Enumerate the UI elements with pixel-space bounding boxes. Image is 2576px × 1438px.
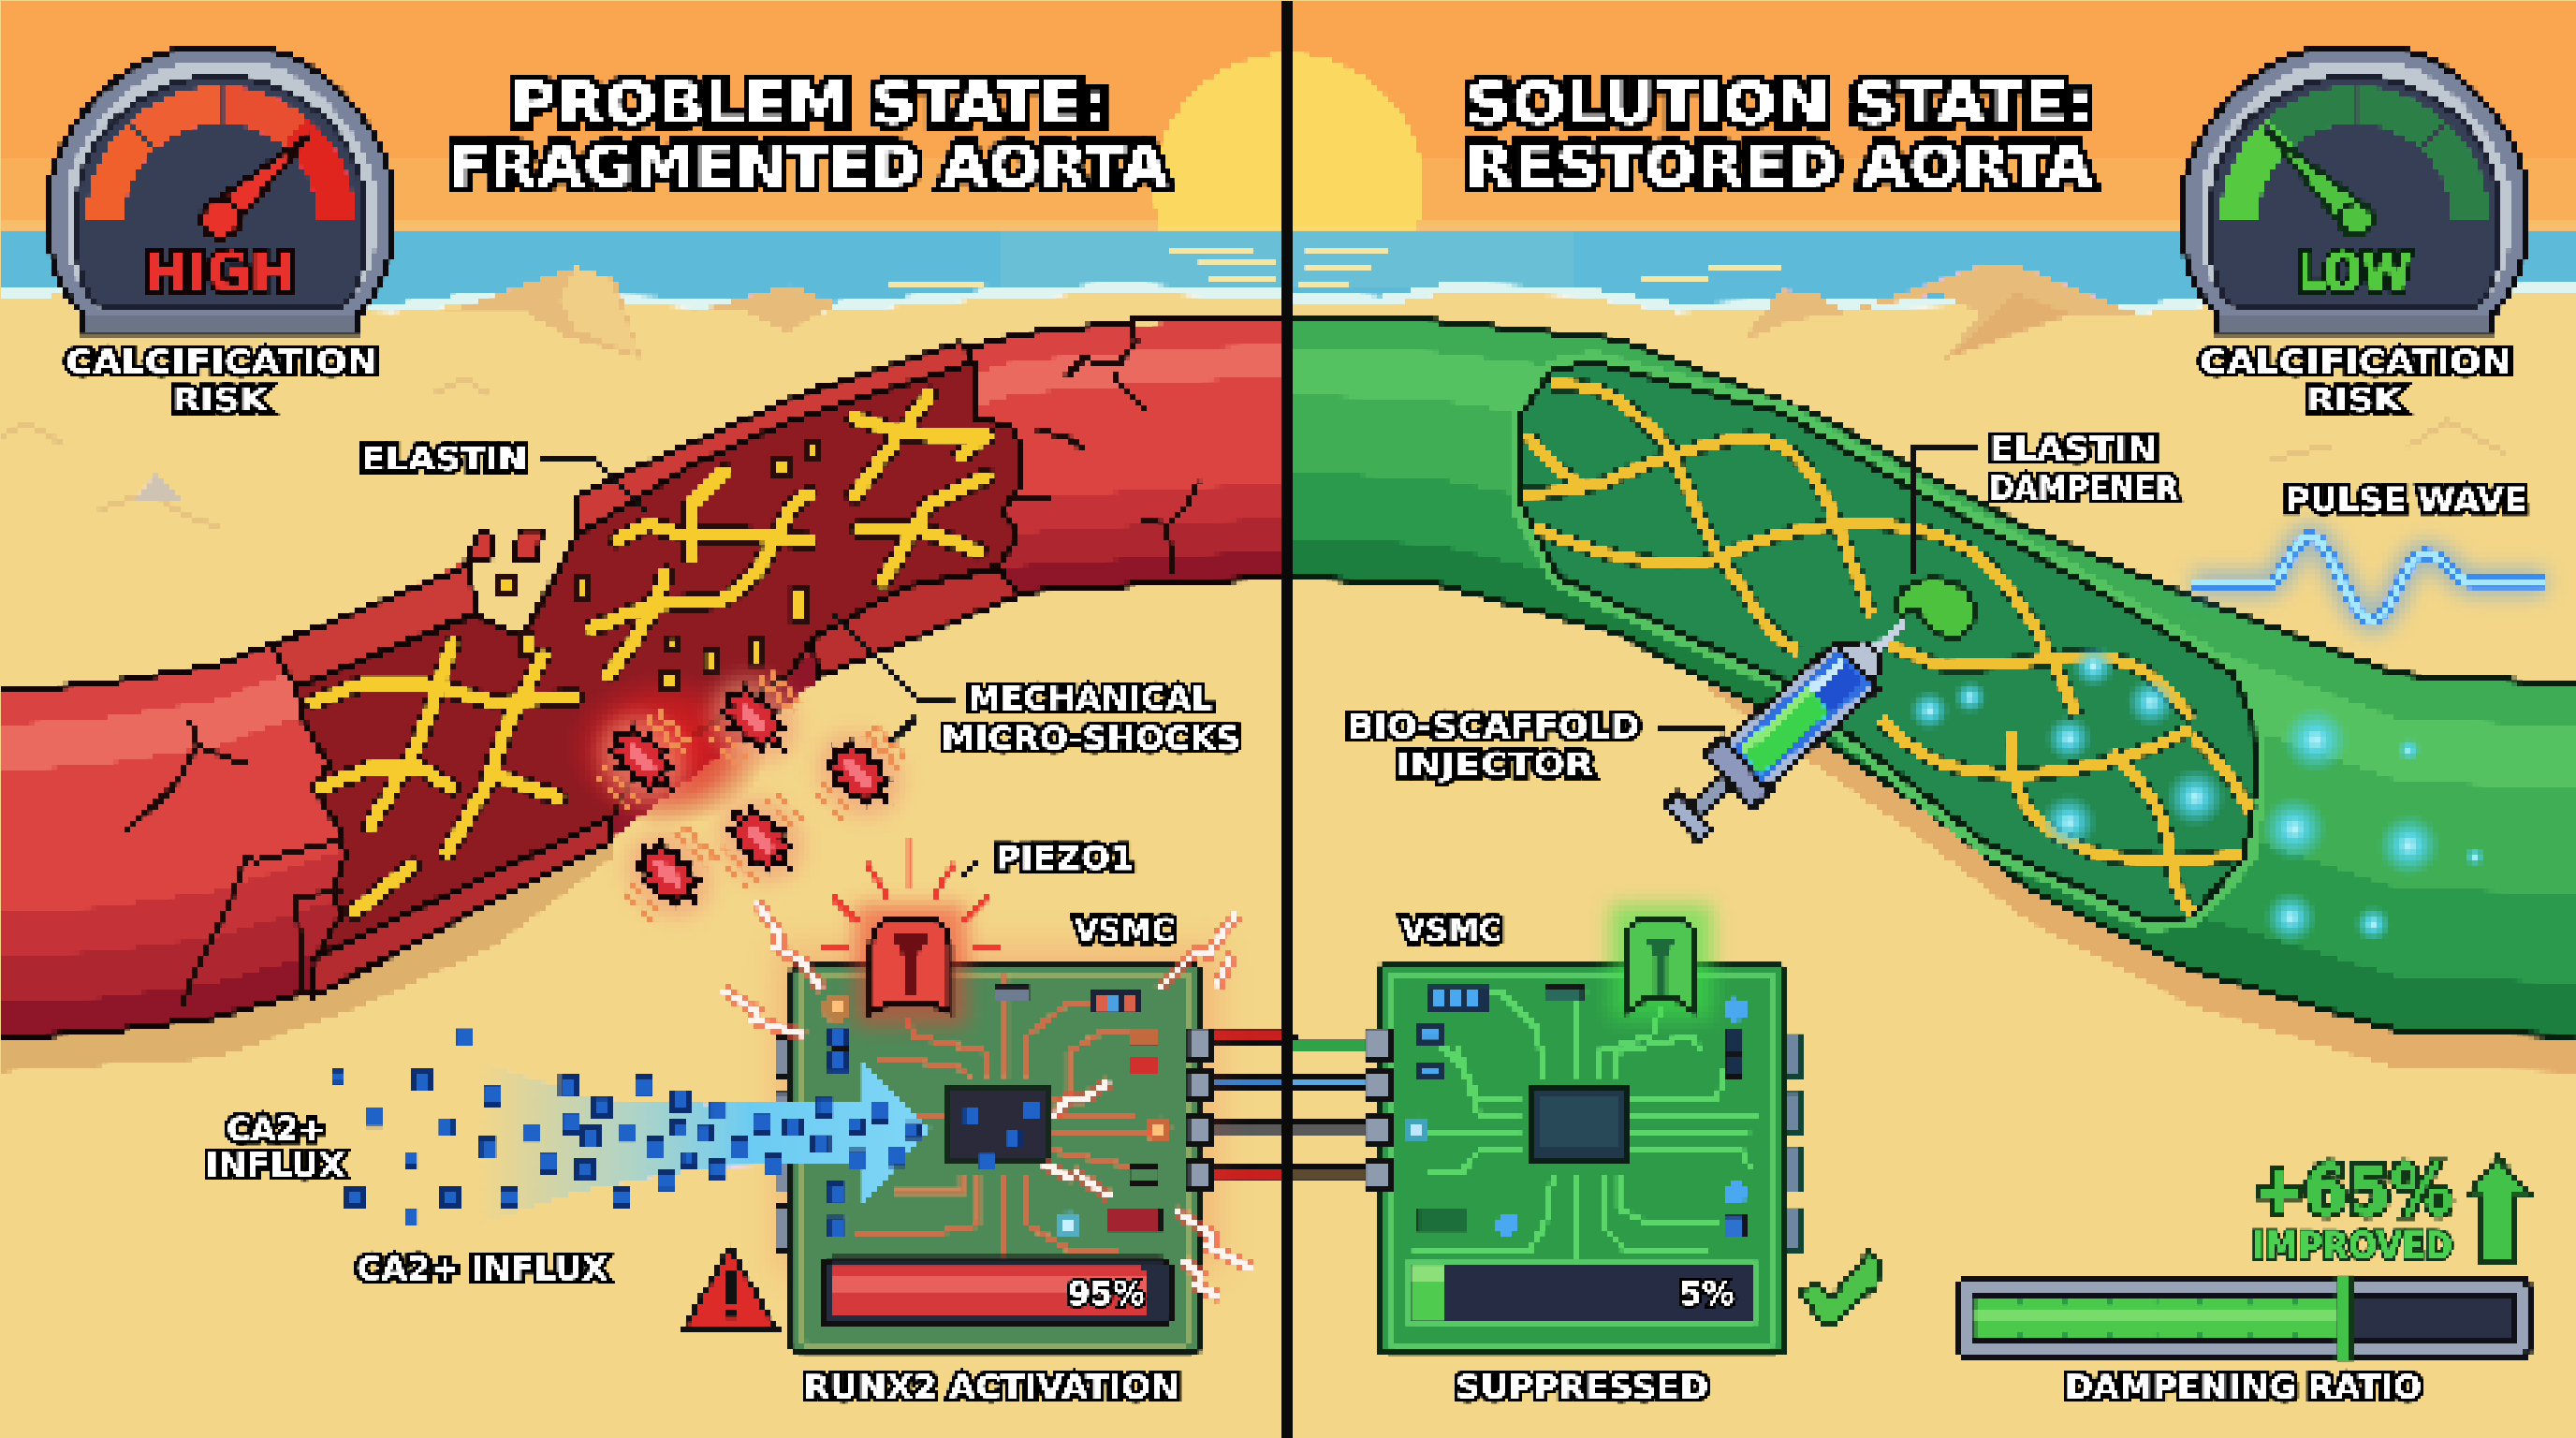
label: CA2+ influx stacked: INFLUX xyxy=(205,1147,345,1185)
calcium ions xyxy=(332,1027,1038,1236)
wall fragments xyxy=(466,529,542,559)
icon: piezo1 channel activated xyxy=(822,838,999,1025)
icon: piezo1 channel calm xyxy=(1610,903,1712,1019)
title: solution state: SOLUTION STATE: xyxy=(1466,71,2093,138)
title: problem state: FRAGMENTED AORTA xyxy=(448,133,1168,199)
diagram: calcium ion influx xyxy=(332,1027,1038,1236)
sand dunes xyxy=(444,263,2134,359)
label: calcification risk right xyxy=(2200,343,2512,419)
label: 95 percent: 95% xyxy=(1068,1275,1145,1313)
label: mechanical micro-shocks: MICRO-SHOCKS xyxy=(942,719,1240,757)
icon: bio-scaffold syringe injector xyxy=(1657,595,1927,849)
influx arrow xyxy=(476,1060,931,1225)
torn wall strips xyxy=(271,342,1018,996)
board components xyxy=(822,986,1171,1238)
elastin dampener injection blob xyxy=(1896,579,1973,640)
green aorta ground shadow xyxy=(1708,666,2576,1071)
gauge reading: low: LOW xyxy=(2297,241,2411,304)
icon: central cable bundle xyxy=(1208,1035,1367,1173)
exposed lumen xyxy=(296,361,1020,956)
leader: elastin dampener xyxy=(1912,448,1978,575)
aorta red wall bands xyxy=(0,317,1288,1036)
label: mechanical micro-shocks xyxy=(942,680,1240,757)
red board glow xyxy=(775,945,1219,1273)
title: solution state xyxy=(1466,71,2093,199)
label: VSMC right: VSMC xyxy=(1401,912,1501,950)
label: bio-scaffold injector: BIO-SCAFFOLD xyxy=(1347,708,1640,746)
label: calcification risk right: RISK xyxy=(2306,381,2404,419)
panel: fragmented aorta xyxy=(0,317,1288,1071)
circuit traces xyxy=(1412,990,1758,1257)
label: pulse wave: PULSE WAVE xyxy=(2285,481,2526,520)
label: RUNX2 activation: RUNX2 ACTIVATION xyxy=(803,1369,1179,1407)
leader: micro-shocks xyxy=(829,609,953,741)
microchip xyxy=(1530,1090,1628,1158)
micro-shock particles xyxy=(578,655,923,938)
board components xyxy=(1403,986,1747,1236)
right-side pins xyxy=(1186,1029,1211,1188)
aorta outlines xyxy=(0,317,1288,1036)
torn gap in aorta wall xyxy=(465,490,578,638)
title: solution state: RESTORED AORTA xyxy=(1466,133,2094,199)
label: bio-scaffold injector xyxy=(1347,708,1640,784)
cracks in wall xyxy=(124,318,1197,1004)
label: calcification risk right: CALCIFICATION xyxy=(2200,343,2512,381)
elastin fibres xyxy=(1521,384,2249,912)
side connectors xyxy=(775,1036,792,1249)
circuit board body xyxy=(792,962,1199,1354)
title: problem state: PROBLEM STATE: xyxy=(511,71,1107,138)
side connectors xyxy=(1784,1034,1801,1249)
panel: activated VSMC circuit board xyxy=(723,838,1251,1354)
gauge reading: high: HIGH xyxy=(144,241,294,304)
micro-shock glow on lumen xyxy=(564,668,768,827)
label: CA2+ influx: CA2+ INFLUX xyxy=(357,1250,607,1288)
label: mechanical micro-shocks: MECHANICAL xyxy=(968,680,1212,718)
label: CA2+ influx stacked xyxy=(205,1110,345,1185)
leader: bio-scaffold xyxy=(1656,725,1725,727)
aorta green wall bands xyxy=(1288,315,2576,1035)
label: piezo1: PIEZO1 xyxy=(996,839,1134,877)
label: calcification risk left: CALCIFICATION xyxy=(66,343,378,381)
icon: green check mark xyxy=(1799,1251,1880,1325)
rock on the sand xyxy=(128,473,184,503)
stat: +65%: +65% xyxy=(2252,1152,2452,1231)
label: elastin: ELASTIN xyxy=(361,440,527,478)
left-side pins xyxy=(1365,1029,1390,1188)
circuit traces xyxy=(855,973,1150,1257)
glowing repair particles xyxy=(1909,644,2484,943)
label: bio-scaffold injector: INJECTOR xyxy=(1397,745,1593,784)
label: suppressed: SUPPRESSED xyxy=(1456,1369,1708,1407)
RUNX2 progress bar xyxy=(822,1258,1170,1325)
label: dampening ratio: DAMPENING RATIO xyxy=(2065,1369,2422,1407)
electrical sparks xyxy=(723,902,1251,1297)
aorta ground shadow xyxy=(0,838,611,1071)
icon: up arrow improvement xyxy=(2466,1157,2532,1260)
gauge: low calcification risk xyxy=(2184,50,2525,332)
icon: pulse wave xyxy=(2191,536,2545,620)
lumen with elastin lattice xyxy=(1521,361,2254,920)
chart: dampening ratio bar xyxy=(1958,1275,2528,1360)
label: elastin dampener: ELASTIN xyxy=(1989,430,2157,468)
panel: restored aorta xyxy=(1288,315,2576,1071)
stat: improved: IMPROVED xyxy=(2252,1224,2452,1268)
icon: warning triangle xyxy=(683,1247,775,1328)
label: elastin dampener: DAMPENER xyxy=(1989,470,2178,508)
label: calcification risk left: RISK xyxy=(172,381,270,419)
center divider xyxy=(1283,0,1293,1438)
suppressed progress bar xyxy=(1406,1260,1756,1325)
leader: piezo1 xyxy=(961,861,977,877)
label: CA2+ influx stacked: CA2+ xyxy=(227,1110,326,1149)
green aorta outlines xyxy=(1288,315,2576,1035)
label: elastin dampener xyxy=(1989,430,2178,508)
broken elastin fibres xyxy=(312,394,986,912)
label: calcification risk left xyxy=(66,343,378,419)
title: problem state xyxy=(448,71,1168,199)
label: 5 percent: 5% xyxy=(1679,1275,1734,1313)
panel: suppressed VSMC circuit board xyxy=(1365,903,1801,1354)
gauge: high calcification risk xyxy=(50,50,391,332)
leader: elastin xyxy=(539,459,644,509)
microchip xyxy=(944,1090,1046,1158)
label: VSMC left: VSMC xyxy=(1075,912,1175,950)
circuit board body xyxy=(1379,962,1784,1354)
